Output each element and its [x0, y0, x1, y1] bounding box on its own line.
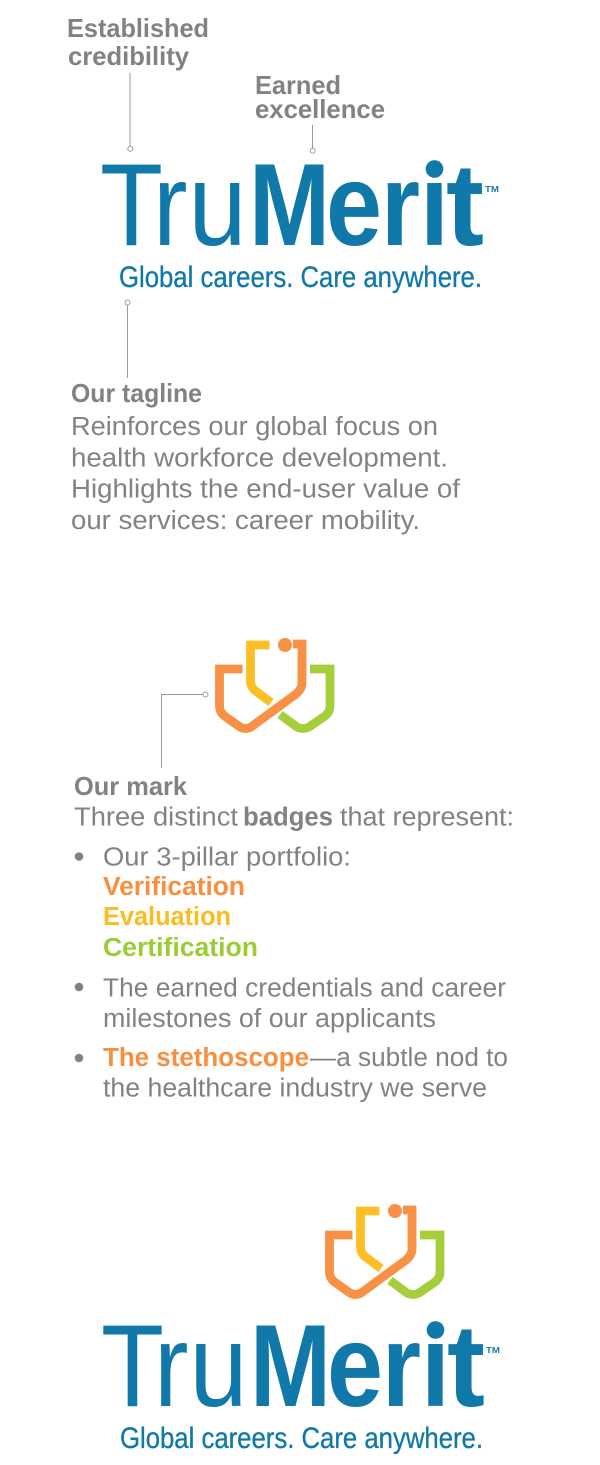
bullet list: pillar portfolio — [75, 844, 351, 962]
text block: our mark heading: that represent: — [340, 804, 514, 832]
bullet list: pillar portfolio: Our 3-pillar portfolio: — [103, 844, 351, 872]
bullet list: pillar portfolio: Certification — [103, 934, 258, 962]
logo wordmark: TruMerit: M — [249, 139, 330, 270]
logo wordmark: bottom TruMerit: u — [190, 1300, 248, 1431]
text block: our tagline: Our tagline — [71, 378, 202, 408]
text block: our tagline: our services: career mobility. — [71, 507, 420, 535]
bullet list: pillar portfolio: Verification — [103, 873, 245, 901]
bullet: stethoscope — [75, 1044, 508, 1103]
logo wordmark: bottom TruMerit: T — [101, 1300, 164, 1431]
text block: our mark heading — [74, 771, 514, 832]
logo wordmark: bottom TruMerit: r — [382, 1300, 421, 1431]
logo wordmark: TruMerit: T — [100, 139, 163, 270]
connector: tagline — [125, 300, 130, 378]
label: established credibility — [67, 13, 209, 71]
logo tagline: Global careers. Care anywhere. — [119, 261, 482, 294]
connector: established credibility — [128, 73, 133, 151]
logo wordmark: TruMerit: r — [153, 139, 188, 270]
logo wordmark: bottom TruMerit: t — [447, 1300, 485, 1431]
icon: mark with three badges — [220, 638, 330, 728]
label: established credibility: Established — [67, 13, 209, 43]
bullet: credentials: The earned credentials and career — [103, 975, 507, 1003]
logo wordmark: bottom TruMerit: M — [250, 1300, 331, 1431]
icon: mark above bottom logo — [330, 1204, 440, 1294]
bullet: stethoscope: the healthcare industry we serve — [103, 1075, 487, 1103]
logo wordmark: bottom TruMerit: TM — [486, 1346, 500, 1355]
logo wordmark: TruMerit: u — [188, 139, 246, 270]
logo wordmark: bottom TruMerit: i — [421, 1300, 450, 1431]
logo wordmark: bottom TruMerit: r — [154, 1300, 188, 1431]
label: earned excellence — [255, 70, 385, 124]
bullet: stethoscope: —a subtle nod to — [310, 1044, 508, 1072]
logo wordmark: TruMerit: t — [446, 139, 484, 270]
text block: our mark heading: badges — [243, 804, 333, 832]
logo wordmark: TruMerit: e — [326, 139, 382, 270]
connector: mark — [162, 692, 208, 768]
label: earned excellence: excellence — [255, 94, 385, 124]
bullet: stethoscope: The stethoscope — [103, 1044, 309, 1072]
text block: our tagline: health workforce development. — [71, 444, 448, 472]
logo wordmark: TruMerit: TM — [485, 185, 499, 194]
logo tagline: bottom: Global careers. Care anywhere. — [120, 1422, 483, 1455]
logo wordmark: TruMerit: r — [381, 139, 420, 270]
label: earned excellence: Earned — [255, 70, 341, 100]
connector: earned excellence — [310, 125, 315, 153]
bullet list: pillar portfolio: Evaluation — [103, 903, 231, 931]
text block: our tagline — [71, 378, 461, 535]
text block: our tagline: Highlights the end-user value of — [71, 476, 461, 504]
text block: our mark heading: Three distinct — [74, 804, 238, 832]
logo wordmark: bottom TruMerit — [103, 1321, 500, 1407]
logo wordmark: TruMerit — [102, 160, 498, 246]
logo wordmark: TruMerit: i — [420, 139, 449, 270]
bullet: credentials: milestones of our applicants — [103, 1005, 436, 1033]
label: established credibility: credibility — [68, 41, 190, 71]
logo wordmark: bottom TruMerit: e — [327, 1300, 383, 1431]
text block: our tagline: Reinforces our global focus on — [71, 413, 438, 441]
text block: our mark heading: Our mark — [74, 771, 188, 801]
bullet: credentials — [75, 975, 507, 1033]
